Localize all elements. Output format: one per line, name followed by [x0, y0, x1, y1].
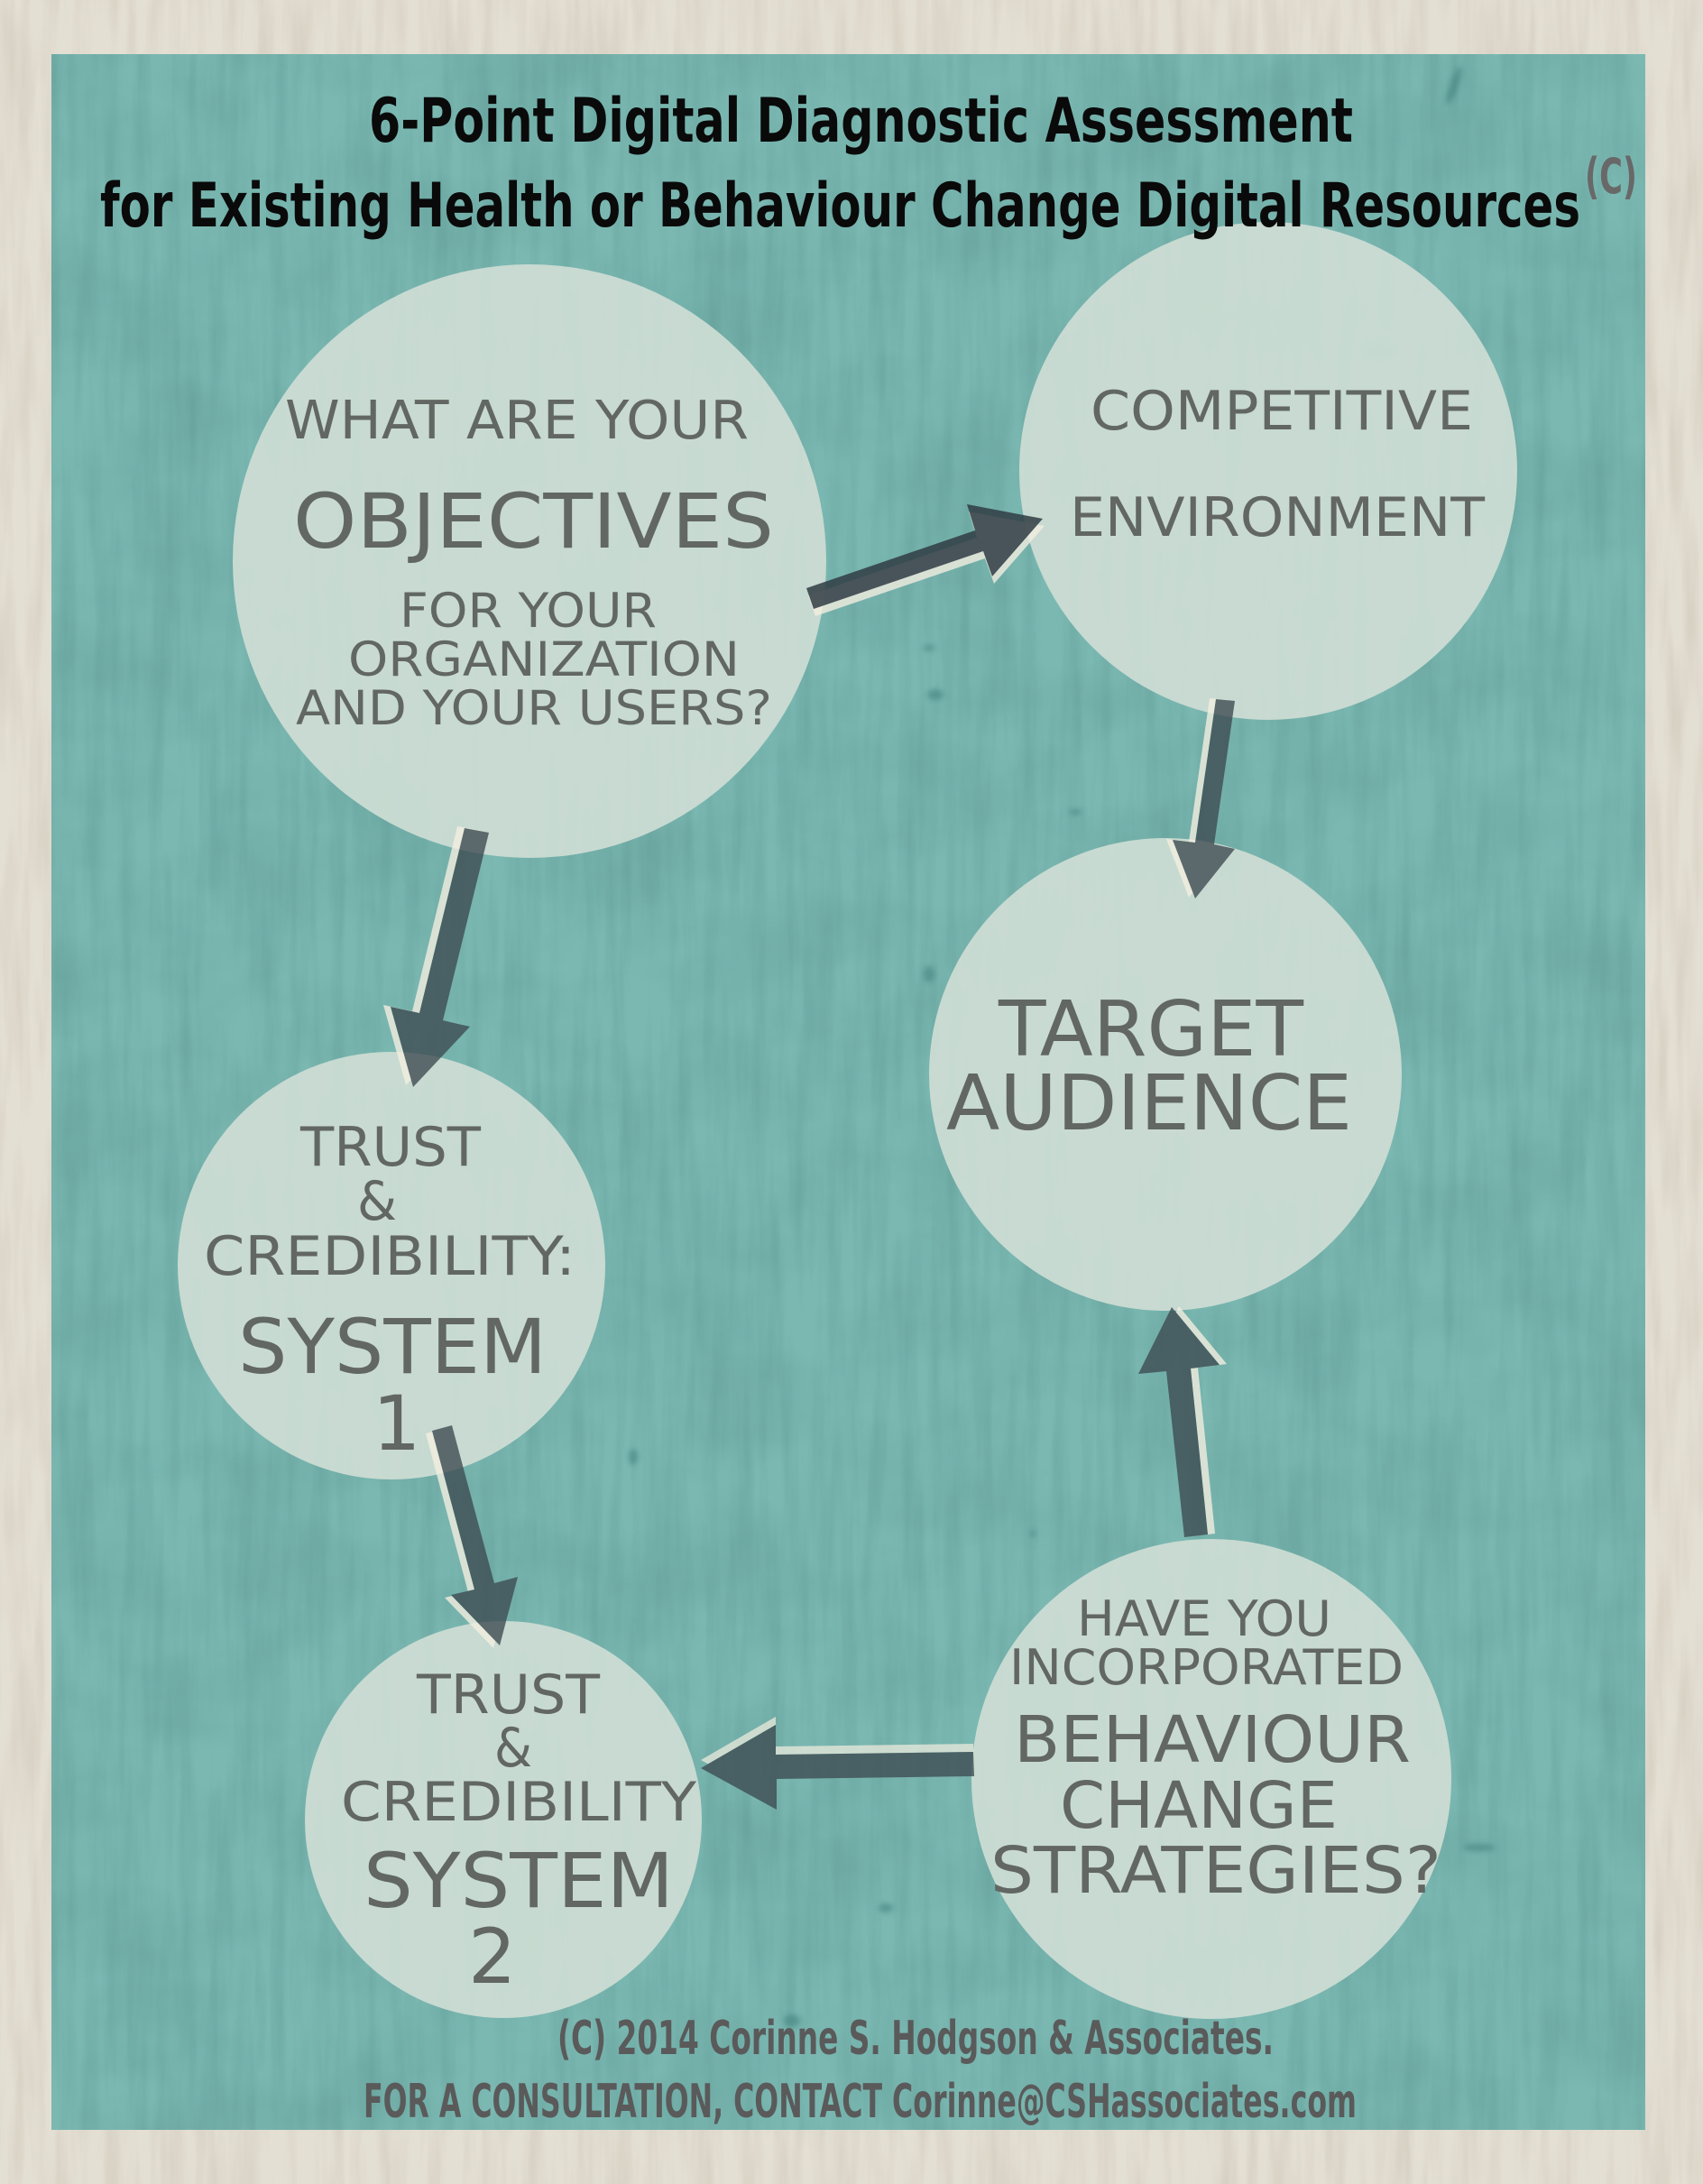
circle: behaviour change strategies: CHANGE — [1060, 1768, 1338, 1843]
arrow: system 1 to system 2 — [426, 1425, 518, 1648]
arrow: behaviour change to system 2 — [701, 1717, 974, 1810]
circle: competitive environment — [1019, 222, 1517, 720]
circle: trust and credibility system 2 — [305, 1621, 702, 2018]
circle: objectives — [233, 264, 826, 858]
title: (C) — [1585, 148, 1637, 205]
circle: trust and credibility system 1: CREDIBILITY: — [204, 1225, 575, 1288]
circle: objectives: ORGANIZATION — [348, 632, 740, 687]
circle: trust and credibility system 2: CREDIBILITY — [341, 1771, 696, 1834]
arrow: objectives to system 1 — [383, 826, 489, 1087]
footer credit: (C) 2014 Corinne S. Hodgson & Associates. — [557, 2012, 1274, 2066]
circle: competitive environment: ENVIRONMENT — [1070, 486, 1485, 549]
circle: behaviour change strategies: HAVE YOU — [1077, 1590, 1331, 1647]
circle: trust and credibility system 1: TRUST — [299, 1116, 481, 1179]
circle: trust and credibility system 1: SYSTEM — [238, 1303, 547, 1391]
circle: target audience — [929, 838, 1402, 1311]
circle: behaviour change strategies: STRATEGIES? — [990, 1833, 1441, 1908]
footer credit — [364, 2012, 1357, 2129]
circle: objectives: AND YOUR USERS? — [296, 681, 772, 736]
circle: trust and credibility system 2: 2 — [468, 1912, 516, 2001]
circle: trust and credibility system 2: & — [494, 1717, 532, 1780]
title — [100, 86, 1637, 242]
circle: target audience: TARGET — [998, 985, 1304, 1074]
circle: trust and credibility system 2: TRUST — [416, 1663, 600, 1727]
circle: competitive environment: COMPETITIVE — [1091, 380, 1473, 443]
title: 6-Point Digital Diagnostic Assessment — [369, 86, 1353, 157]
circle: behaviour change strategies: INCORPORATED — [1009, 1639, 1404, 1696]
arrow: behaviour change to target audience — [1138, 1306, 1227, 1537]
circle: trust and credibility system 1: & — [357, 1170, 397, 1233]
circle: trust and credibility system 2: SYSTEM — [364, 1837, 674, 1925]
circle: objectives: WHAT ARE YOUR — [285, 389, 749, 451]
circle: trust and credibility system 1 — [178, 1052, 605, 1479]
circle: trust and credibility system 1: 1 — [373, 1379, 420, 1468]
circle: target audience: AUDIENCE — [946, 1059, 1352, 1148]
arrow: objectives to competitive environment — [806, 504, 1045, 616]
circle: behaviour change strategies: BEHAVIOUR — [1014, 1702, 1411, 1777]
circle: objectives: FOR YOUR — [400, 584, 657, 639]
circle: behaviour change strategies — [971, 1539, 1451, 2019]
arrow: competitive environment to target audience — [1166, 698, 1235, 898]
circle: objectives: OBJECTIVES — [293, 477, 774, 566]
